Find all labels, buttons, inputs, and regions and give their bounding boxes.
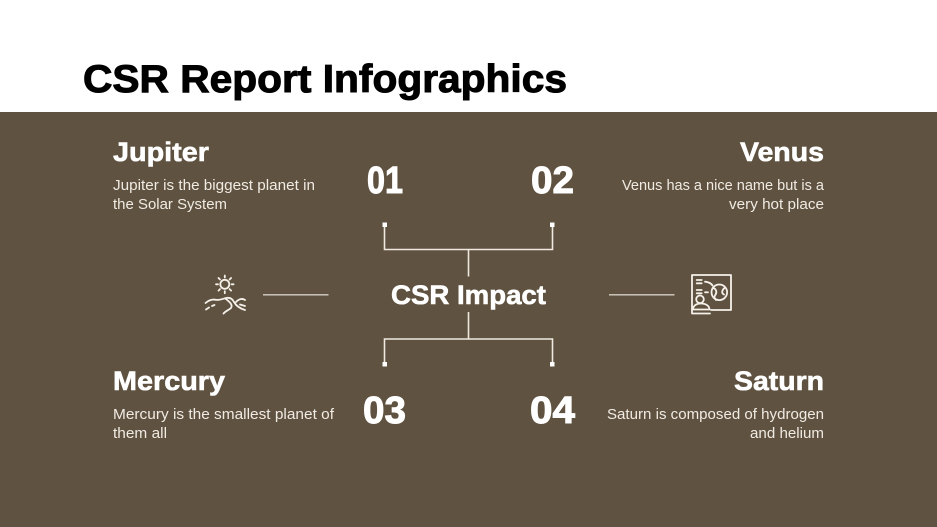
text: Venus description: Venus has a nice name but is a xyxy=(622,178,825,194)
top connector xyxy=(382,222,554,276)
brown background panel xyxy=(0,112,937,527)
central heading: CSR Impact: CSR Impact xyxy=(391,280,546,310)
panel: Mercury xyxy=(113,366,335,442)
text: Venus description xyxy=(622,178,825,213)
number 02: 02 xyxy=(531,160,574,202)
number 04: 04 xyxy=(530,390,575,432)
text: Saturn description xyxy=(607,407,824,442)
text: Mercury description xyxy=(113,407,335,442)
panel: Venus xyxy=(622,137,825,213)
right line xyxy=(609,294,674,296)
icon: presenter with globe board xyxy=(692,275,731,314)
text: Saturn description: Saturn is composed of hydrogen xyxy=(607,407,824,423)
text: Mercury description: them all xyxy=(113,426,167,442)
icon: sun over mountains xyxy=(206,276,245,314)
text: Jupiter description: the Solar System xyxy=(113,197,227,213)
text: Jupiter description: Jupiter is the biggest planet in xyxy=(113,178,315,194)
left line xyxy=(263,294,328,296)
bottom connector xyxy=(382,312,554,366)
heading: Mercury: Mercury xyxy=(113,366,225,396)
text: Venus description: very hot place xyxy=(729,197,824,213)
text: Saturn description: and helium xyxy=(750,426,824,442)
title: CSR Report Infographics xyxy=(83,58,567,101)
panel: Saturn xyxy=(607,366,824,442)
number 01: 01 xyxy=(367,160,403,202)
heading: Saturn: Saturn xyxy=(734,366,824,396)
text: Jupiter description xyxy=(113,178,315,213)
panel: Jupiter xyxy=(113,137,315,213)
number 03: 03 xyxy=(363,390,406,432)
text: Mercury description: Mercury is the smallest planet of xyxy=(113,407,335,423)
heading: Jupiter: Jupiter xyxy=(113,137,210,167)
heading: Venus: Venus xyxy=(740,137,824,167)
